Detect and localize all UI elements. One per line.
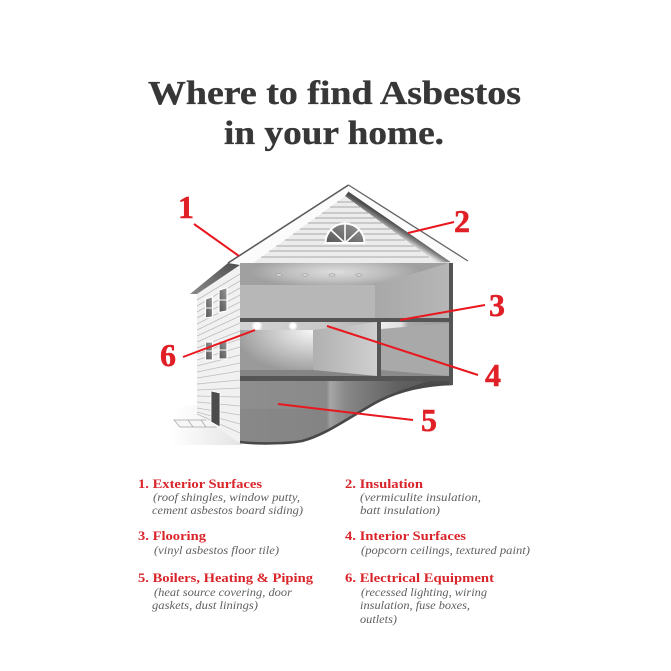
legend item 2: batt insulation) — [360, 503, 440, 517]
attic window — [326, 224, 364, 243]
callout 6: 6 — [160, 337, 176, 373]
legend item 2: (vermiculite insulation, — [360, 490, 481, 504]
callout 5: 5 — [421, 402, 437, 438]
middle rooms — [240, 320, 449, 376]
soffit shading — [345, 191, 453, 263]
legend item 5 — [138, 570, 314, 612]
upper room — [240, 263, 449, 318]
gable siding — [253, 196, 437, 263]
legend item 6: insulation, fuse boxes, — [360, 598, 470, 612]
callout 3: 3 — [489, 287, 505, 323]
callout 3 — [400, 287, 505, 323]
legend item 5: (heat source covering, door — [154, 585, 292, 599]
callout 4: 4 — [485, 357, 501, 393]
legend item 1: (roof shingles, window putty, — [153, 490, 300, 504]
title: Where to find Asbestos — [148, 75, 521, 112]
callout 5 — [278, 402, 437, 438]
legend item 3 — [138, 528, 279, 557]
windows — [206, 288, 227, 360]
legend item 6: 6. Electrical Equipment — [345, 570, 495, 585]
legend item 4: (popcorn ceilings, textured paint) — [361, 543, 530, 557]
basement — [240, 380, 452, 445]
legend item 1 — [138, 476, 303, 517]
legend item 3: (vinyl asbestos floor tile) — [154, 543, 279, 557]
legend item 2: 2. Insulation — [345, 476, 424, 491]
side wall with siding — [197, 265, 240, 443]
legend item 2 — [345, 476, 481, 517]
callout 6 — [160, 330, 255, 373]
legend item 1: 1. Exterior Surfaces — [138, 476, 262, 491]
side roof — [190, 263, 240, 294]
walkway — [174, 420, 218, 427]
callout 4 — [327, 326, 501, 393]
callout 2: 2 — [454, 203, 470, 239]
legend item 6 — [345, 570, 495, 626]
legend item 5: gaskets, dust linings) — [152, 598, 258, 612]
legend item 3: 3. Flooring — [138, 528, 207, 543]
legend item 6: outlets) — [360, 612, 397, 626]
title — [148, 75, 521, 152]
callout 1 — [178, 189, 239, 256]
ground shadow — [170, 405, 242, 445]
house illustration — [170, 185, 468, 445]
legend item 4: 4. Interior Surfaces — [345, 528, 466, 543]
floor slabs and outer wall — [240, 263, 453, 385]
legend item 5: 5. Boilers, Heating & Piping — [138, 570, 314, 585]
legend item 4 — [345, 528, 530, 557]
callout 2 — [408, 203, 470, 239]
legend item 1: cement asbestos board siding) — [152, 503, 303, 517]
door — [211, 391, 220, 427]
legend item 6: (recessed lighting, wiring — [361, 585, 487, 599]
callout 1: 1 — [178, 189, 194, 225]
roof fascia — [228, 185, 468, 263]
title: in your home. — [224, 115, 444, 152]
